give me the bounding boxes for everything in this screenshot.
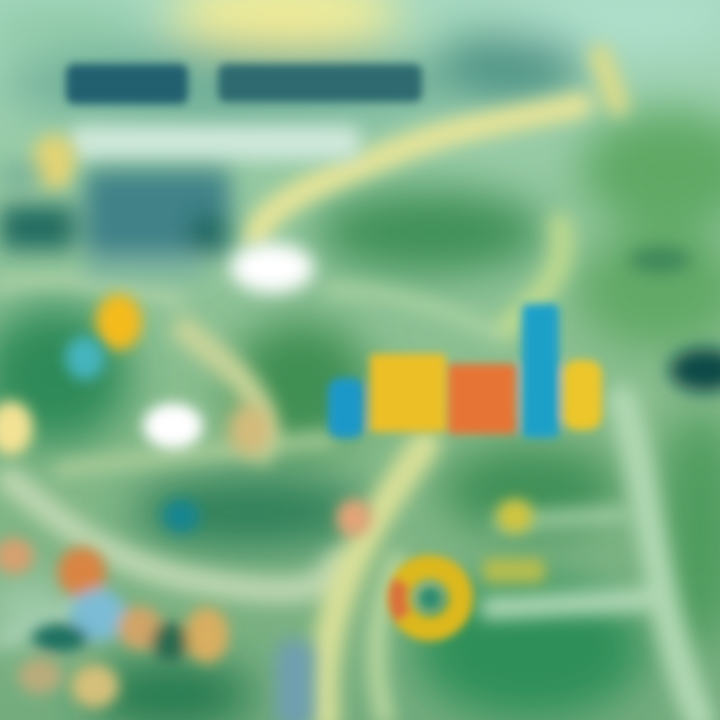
legend dots near donut [336,499,545,583]
icon: yellow marker [96,294,142,350]
subtitle block [70,126,360,160]
blue stream bottom [276,640,314,720]
icon: teal marker [65,336,105,380]
donut chart [398,567,461,629]
icon: tan marker [228,404,272,456]
bar: small yellow [563,360,602,430]
icon: blue-teal marker [162,499,200,533]
title block [66,64,422,104]
bar: tall blue [522,304,559,438]
icon: white marker [143,403,203,449]
white cloud marker [230,243,314,293]
icon: yellow badge [32,134,76,190]
bar: blue [328,378,364,438]
bottom-left cluster of markers [0,538,229,708]
icon: pale yellow marker [0,401,33,455]
bar chart [328,304,602,438]
dark text panel [0,165,230,277]
dark hill right [628,248,720,392]
bar: yellow [370,354,446,432]
bar: orange [448,364,516,434]
map markers left [0,294,272,533]
